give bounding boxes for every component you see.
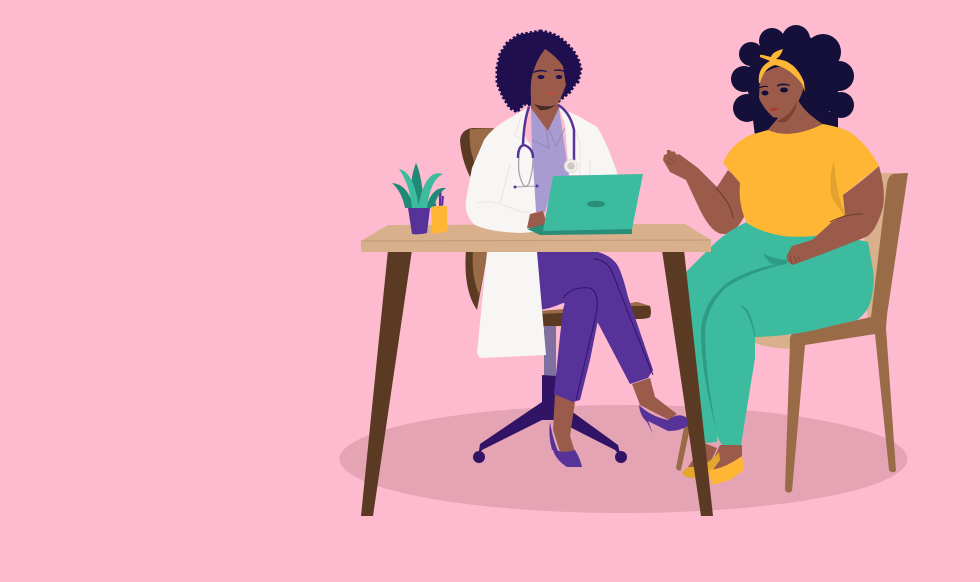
patient t-shirt [723, 124, 879, 237]
chair back lower highlight [473, 250, 488, 295]
doctor neck [531, 100, 559, 131]
chair post [544, 326, 556, 378]
laptop [527, 174, 643, 235]
doctor chair [460, 128, 651, 463]
chair far leg [676, 407, 690, 471]
patient face [759, 66, 804, 118]
doctor trousers front leg [554, 287, 599, 402]
stethoscope [514, 105, 578, 188]
chair back upper [460, 128, 494, 177]
doctor front shin [553, 394, 575, 452]
t-shirt fold [830, 160, 847, 220]
chair wheel right [615, 451, 627, 463]
doctor shirt [531, 108, 569, 212]
doctor face [531, 49, 566, 108]
doctor chin shadow [534, 104, 556, 110]
patient hair [731, 25, 854, 136]
table [361, 224, 713, 516]
plant leaves [392, 163, 446, 208]
doctor eyes and brows [533, 69, 564, 79]
plant pot [408, 208, 430, 234]
patient trousers [677, 222, 874, 445]
patient lips [769, 108, 780, 111]
doctor lips [547, 92, 558, 95]
table edge line [361, 240, 711, 241]
table left leg [361, 250, 412, 516]
doctor coat lower [477, 252, 546, 358]
elbow crease [716, 188, 733, 218]
plant and pencil cup [392, 163, 447, 234]
patient left arm [787, 166, 884, 265]
table right leg [662, 250, 713, 516]
chair back lower [465, 250, 488, 310]
hand creases [666, 157, 675, 165]
pencils [431, 192, 444, 207]
doctor white coat [466, 107, 618, 233]
table top [361, 224, 711, 252]
doctor hair [497, 31, 581, 112]
patient feet [688, 443, 742, 475]
patient eyes and brows [758, 84, 790, 96]
doctor trousers upper leg [537, 252, 653, 384]
doctor back shoe [639, 405, 688, 434]
chair seat [538, 302, 651, 327]
trouser seams [563, 259, 653, 400]
patient headband [759, 49, 805, 92]
chair back highlight [470, 128, 494, 165]
patient right arm and hand [663, 150, 745, 234]
chair base [478, 375, 621, 457]
doctor back shin [632, 378, 677, 420]
doctor lower body [477, 252, 688, 467]
patient jaw shadow [777, 100, 797, 122]
pencil cup [431, 206, 447, 233]
patient [663, 25, 884, 485]
patient neck [767, 100, 824, 140]
doctor front shoe [549, 422, 582, 467]
chair seat cushion [750, 335, 795, 349]
arm crease [830, 214, 863, 222]
hand creases on thigh [790, 256, 800, 264]
chair seat highlight [538, 302, 650, 314]
laptop screen [543, 174, 643, 231]
chair frame [785, 173, 908, 493]
doctor upper body [466, 31, 643, 235]
floor shadow [340, 405, 908, 513]
laptop logo [587, 201, 605, 207]
coat lapel lines [477, 114, 590, 212]
patient trouser folds [701, 253, 787, 432]
patient shoes [682, 452, 720, 478]
chair wheel left [473, 451, 485, 463]
doctor shirt collar [532, 128, 565, 148]
laptop base [527, 224, 632, 235]
doctor hand [527, 211, 548, 228]
patient chair [676, 173, 908, 493]
chair back cushion [862, 173, 908, 322]
